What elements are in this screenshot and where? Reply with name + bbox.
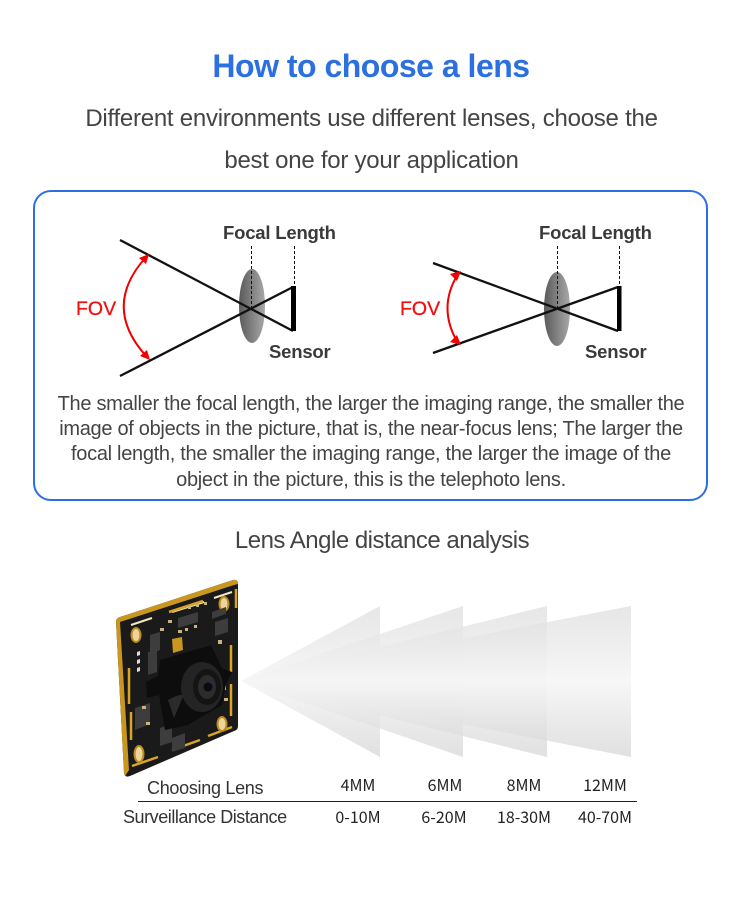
diagram: wide angle: FOV: [76, 298, 116, 320]
diagram: wide angle: Focal Length: [223, 222, 336, 243]
table: lens choices: [123, 772, 637, 828]
row label: choosing lens: Choosing Lens: [147, 778, 263, 798]
diagram: telephoto: Sensor: [585, 341, 647, 362]
lens values: 4MM: [341, 772, 375, 796]
panel description text: image of objects in the picture, that is, the near-focus lens; The larger the: [59, 418, 683, 440]
lens values: 6MM: [428, 772, 462, 796]
diagram: telephoto: [400, 222, 652, 362]
lens values: 12MM: [583, 772, 627, 796]
diagram: telephoto: FOV: [400, 298, 440, 320]
intro text: [85, 104, 658, 174]
board: [116, 580, 238, 777]
divider: [138, 801, 637, 802]
panel description text: The smaller the focal length, the larger the imaging range, the smaller the: [58, 393, 684, 415]
diagram: wide angle: Sensor: [269, 341, 331, 362]
lens values: 8MM: [507, 772, 541, 796]
lens values: [340, 772, 627, 796]
distance values: 6-20M: [421, 804, 467, 828]
distance values: [335, 804, 632, 828]
icon: camera board: [116, 580, 238, 777]
section heading: Lens Angle distance analysis: [235, 527, 529, 554]
distance values: 40-70M: [578, 804, 632, 828]
title: How to choose a lens: [212, 48, 530, 84]
distance values: 0-10M: [335, 804, 381, 828]
row label: surveillance distance: Surveillance Distance: [123, 807, 287, 827]
panel description text: focal length, the smaller the imaging range, the larger the image of the: [71, 443, 671, 465]
panel: focal length comparison: [33, 190, 708, 501]
panel description text: object in the picture, this is the telephoto lens.: [176, 469, 566, 491]
intro text: best one for your application: [224, 147, 519, 174]
diagram: wide angle: [76, 222, 336, 376]
diagram: telephoto: Focal Length: [539, 222, 652, 243]
intro text: Different environments use different lenses, choose the: [85, 104, 658, 132]
panel description text: [58, 393, 684, 491]
chart: lens angle cones: [242, 606, 631, 757]
diagrams: FOV and focal length: [76, 222, 652, 377]
distance values: 18-30M: [497, 804, 551, 828]
